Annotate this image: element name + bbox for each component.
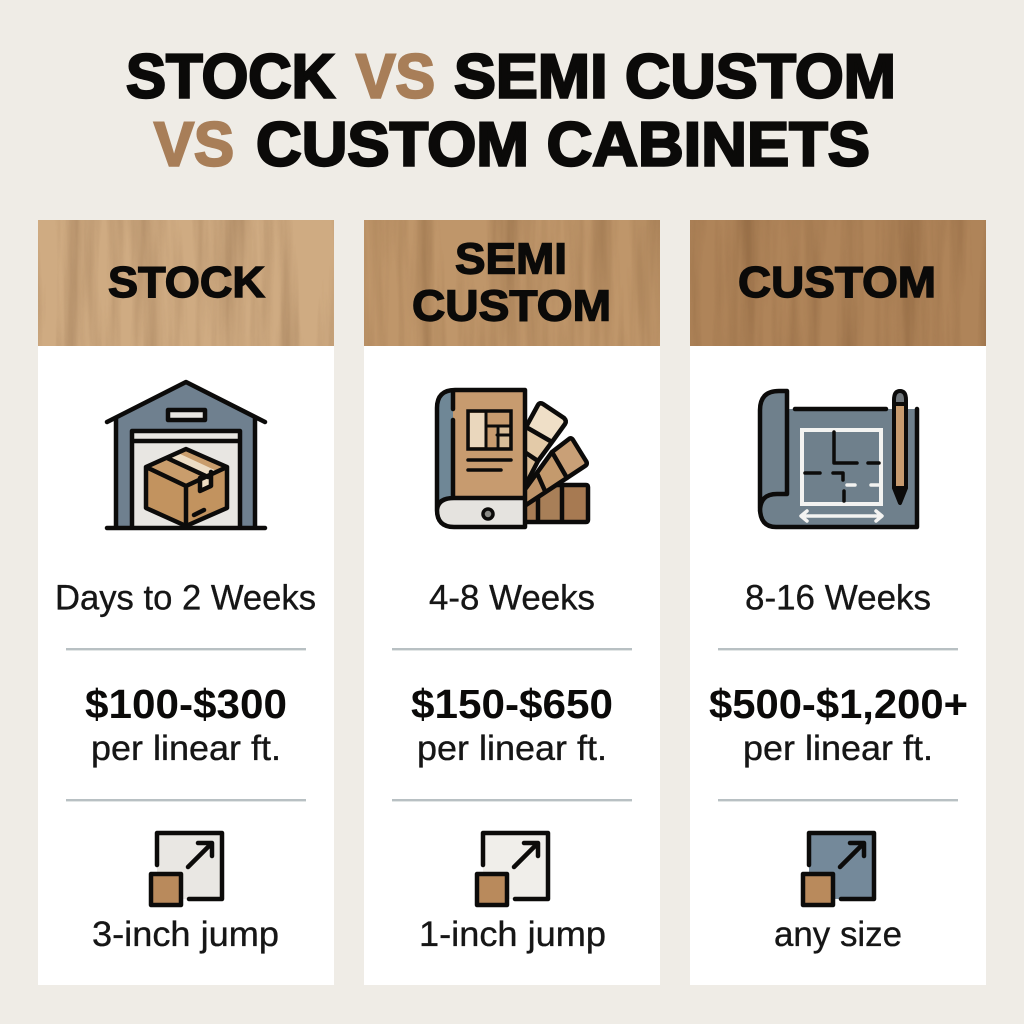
sizing: 3-inch jump: [92, 915, 279, 954]
semi custom header: SEMI: [455, 234, 567, 284]
semi custom header: [364, 220, 660, 346]
icon: warehouse with box: [107, 382, 265, 528]
price: per linear ft.: [417, 729, 607, 768]
icon: resize: [803, 833, 874, 905]
price: per linear ft.: [91, 729, 281, 768]
icon: resize: [477, 833, 548, 905]
title: [126, 42, 896, 180]
custom header: CUSTOM: [738, 258, 936, 307]
panel: custom: [690, 220, 986, 985]
icon: blueprint with pencil: [759, 390, 917, 527]
custom header: [690, 220, 986, 346]
lead time: Days to 2 Weeks: [55, 578, 316, 618]
sizing: 1-inch jump: [419, 915, 606, 954]
title: STOCK: [126, 42, 335, 112]
semi custom header: CUSTOM: [412, 282, 611, 330]
panel: semi custom: [364, 220, 660, 985]
title: VS: [154, 110, 234, 180]
title: CUSTOM CABINETS: [256, 110, 870, 180]
price: $100-$300: [85, 681, 287, 727]
price: [85, 681, 287, 768]
icon: resize: [151, 833, 222, 905]
lead time: 4-8 Weeks: [429, 578, 595, 618]
title: VS: [356, 42, 435, 112]
price: $500-$1,200+: [709, 681, 968, 727]
icon: book with colour swatches: [437, 390, 588, 527]
price: [411, 681, 613, 768]
panel: stock: [38, 220, 334, 985]
title: SEMI CUSTOM: [454, 42, 896, 112]
stock header: [38, 220, 334, 346]
price: [709, 681, 968, 768]
stock header: STOCK: [108, 258, 265, 307]
price: per linear ft.: [743, 729, 933, 768]
price: $150-$650: [411, 681, 613, 727]
lead time: 8-16 Weeks: [745, 578, 931, 618]
sizing: any size: [774, 915, 902, 954]
